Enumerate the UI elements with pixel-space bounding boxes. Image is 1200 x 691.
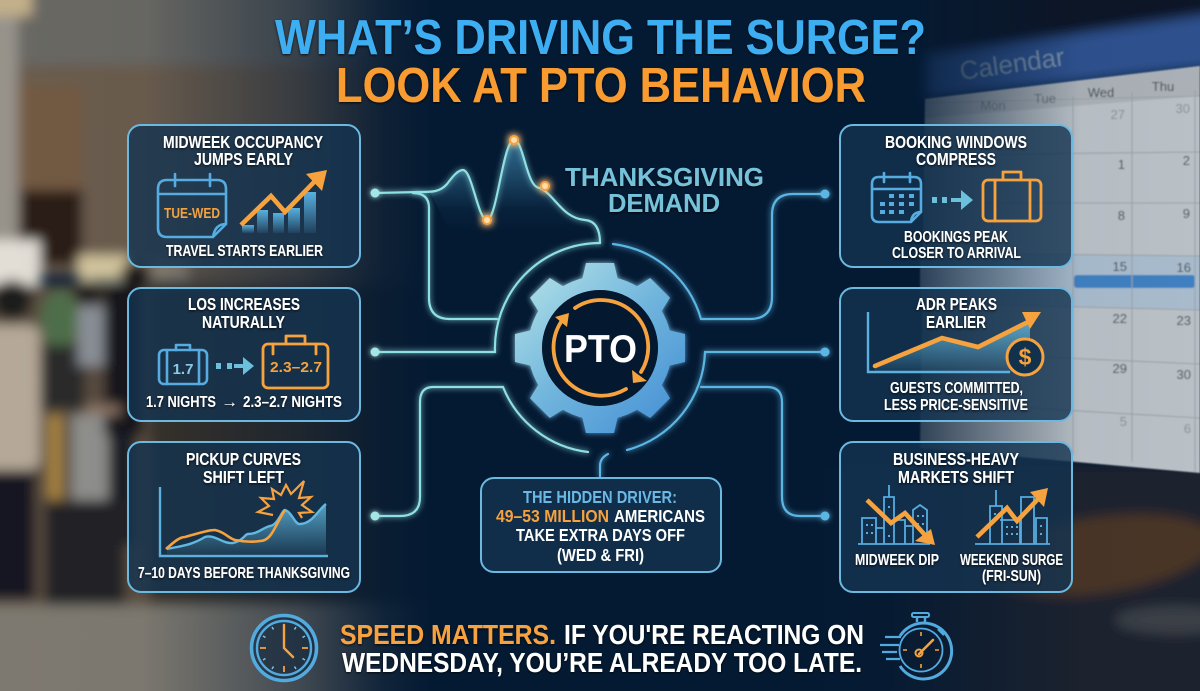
background: blurred hotel lobby and calendar photo: Tue <box>1034 91 1056 106</box>
closing statement: WEDNESDAY, YOU’RE ALREADY TOO LATE. <box>342 647 862 678</box>
background: blurred hotel lobby and calendar photo: 16 <box>1177 260 1191 275</box>
background: blurred hotel lobby and calendar photo: 29 <box>1113 361 1127 376</box>
panel: LOS increases <box>128 288 360 421</box>
icon: clock <box>252 616 316 680</box>
panel: pickup curves: PICKUP CURVES <box>186 449 301 469</box>
panel: business-heavy markets: BUSINESS-HEAVY <box>893 449 1019 469</box>
panel: business-heavy markets: WEEKEND SURGE <box>960 552 1063 569</box>
background: blurred hotel lobby and calendar photo: 23 <box>1177 313 1191 328</box>
background: blurred hotel lobby and calendar photo: Wed <box>1088 85 1114 100</box>
panel: midweek occupancy: TRAVEL STARTS EARLIER <box>166 243 323 260</box>
icon: starburst <box>258 481 312 518</box>
panel: business-heavy markets: MIDWEEK DIP <box>855 552 939 569</box>
panel: LOS increases: LOS INCREASES <box>188 294 300 314</box>
callout: the hidden driver: TAKE EXTRA DAYS OFF <box>516 525 685 545</box>
Thanksgiving demand label <box>565 162 764 218</box>
panel: pickup curves <box>128 442 360 592</box>
callout: the hidden driver: 49–53 MILLION <box>496 506 609 526</box>
icon: calendar Tue-Wed <box>158 174 226 237</box>
background: blurred hotel lobby and calendar photo: 8 <box>1118 208 1125 223</box>
pickup curve chart <box>160 481 328 556</box>
Thanksgiving demand label: THANKSGIVING <box>565 162 764 192</box>
background: blurred hotel lobby and calendar photo: Mon <box>980 98 1006 113</box>
background: blurred hotel lobby and calendar photo: 22 <box>1113 311 1127 326</box>
icon: dollar coin <box>1007 339 1043 375</box>
icon: blue suitcase 1.7: 1.7 <box>173 361 193 378</box>
Thanksgiving demand label: DEMAND <box>608 188 720 218</box>
icon: orange suitcase <box>983 172 1041 221</box>
icon: blue suitcase 1.7 <box>159 345 207 384</box>
title <box>275 11 926 113</box>
panel: midweek occupancy: JUMPS EARLY <box>194 149 293 169</box>
icon: rising bar chart arrow <box>241 170 327 233</box>
icon: orange suitcase 2.3-2.7 <box>263 336 328 388</box>
background: blurred hotel lobby and calendar photo: 5 <box>1120 414 1127 429</box>
title: WHAT’S DRIVING THE SURGE? <box>275 11 926 65</box>
caption: nights <box>146 394 342 411</box>
caption: nights: 2.3–2.7 NIGHTS <box>243 394 342 411</box>
arrow: dotted to suitcase <box>932 190 973 210</box>
demand curve spike <box>375 136 600 243</box>
closing statement: SPEED MATTERS. <box>340 619 556 650</box>
icon: calendar grid <box>872 173 921 222</box>
callout: the hidden driver: AMERICANS <box>614 506 705 526</box>
callout: the hidden driver <box>481 478 721 572</box>
panel: business-heavy markets: MARKETS SHIFT <box>898 467 1014 487</box>
connector lines and Thanksgiving demand curve <box>370 136 830 520</box>
callout: the hidden driver: THE HIDDEN DRIVER: <box>523 487 677 507</box>
background: blurred hotel lobby and calendar photo: 1 <box>1118 157 1125 172</box>
panel: pickup curves: 7–10 DAYS BEFORE THANKSGIVING <box>138 565 350 582</box>
closing statement: IF YOU'RE REACTING ON <box>564 619 864 650</box>
background: blurred hotel lobby and calendar photo: Thu <box>1152 79 1174 94</box>
icon: skyline with rising arrow <box>975 488 1050 544</box>
panel: midweek occupancy: MIDWEEK OCCUPANCY <box>163 132 323 152</box>
panel: booking windows: COMPRESS <box>916 149 996 169</box>
panel: ADR peaks: ADR PEAKS <box>916 294 997 314</box>
panel: booking windows <box>840 125 1072 267</box>
panel: booking windows: CLOSER TO ARRIVAL <box>892 245 1021 262</box>
background: blurred hotel lobby and calendar photo: Calendar <box>958 42 1067 86</box>
panel: business-heavy markets <box>840 442 1072 592</box>
right connectors <box>600 190 830 520</box>
panel: ADR peaks <box>840 288 1072 421</box>
title: LOOK AT PTO BEHAVIOR <box>336 59 866 113</box>
panel: booking windows: BOOKING WINDOWS <box>885 132 1027 152</box>
background: blurred hotel lobby and calendar photo: 6 <box>1184 421 1191 436</box>
panel: booking windows: BOOKINGS PEAK <box>904 229 1008 246</box>
panel: LOS increases: NATURALLY <box>202 312 285 332</box>
background: blurred hotel lobby and calendar photo: 30 <box>1177 367 1191 382</box>
panel: business-heavy markets: (FRI-SUN) <box>982 568 1041 585</box>
arrow: dotted to suitcase <box>216 357 254 375</box>
panel: pickup curves: SHIFT LEFT <box>203 467 284 487</box>
icon: skyline with falling arrow <box>858 485 935 545</box>
callout: the hidden driver: (WED & FRI) <box>557 545 644 565</box>
background: blurred hotel lobby and calendar photo: 2 <box>1183 153 1190 168</box>
caption: nights: → <box>221 394 238 411</box>
PTO gear <box>510 258 690 438</box>
panel: ADR peaks: GUESTS COMMITTED, <box>890 380 1023 397</box>
ADR line chart <box>868 312 1043 375</box>
icon: calendar Tue-Wed: TUE-WED <box>164 206 220 222</box>
background: blurred hotel lobby and calendar photo: 27 <box>1111 107 1125 122</box>
caption: nights: 1.7 NIGHTS <box>146 394 216 411</box>
panel: ADR peaks: EARLIER <box>926 312 986 332</box>
icon: dollar coin: $ <box>1019 344 1032 370</box>
icon: stopwatch <box>880 613 952 679</box>
panel: ADR peaks: LESS PRICE-SENSITIVE <box>884 397 1028 414</box>
panel: midweek occupancy <box>128 125 360 267</box>
background: blurred hotel lobby and calendar photo: 9 <box>1183 206 1190 221</box>
closing statement <box>340 619 864 678</box>
left connectors <box>370 188 600 520</box>
background: blurred hotel lobby and calendar photo: 15 <box>1113 259 1127 274</box>
PTO gear: PTO <box>564 328 637 371</box>
background: blurred hotel lobby and calendar photo: 30 <box>1176 101 1190 116</box>
icon: orange suitcase 2.3-2.7: 2.3–2.7 <box>270 359 322 376</box>
